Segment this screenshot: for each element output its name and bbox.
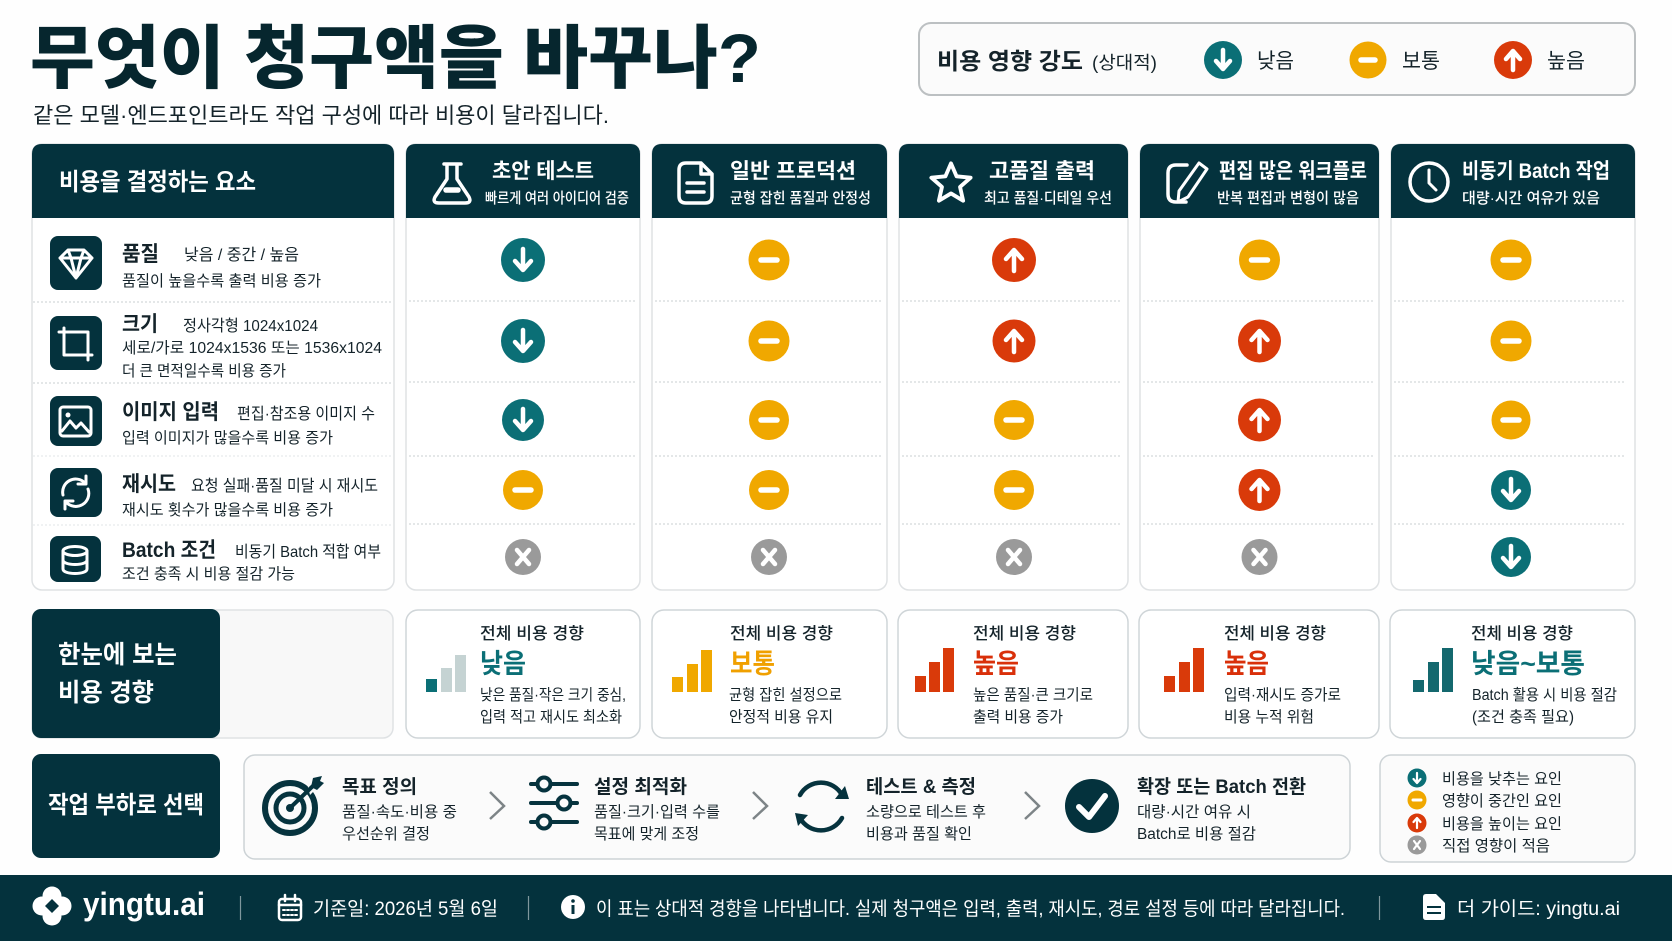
icon: low: [501, 238, 545, 282]
column: standard production: [652, 144, 887, 590]
summary card: high: 높은 품질·큰 크기로: [973, 686, 1093, 704]
panel: cost factors: [32, 144, 394, 590]
icon: high: [1238, 320, 1281, 362]
icon: minimal: [751, 539, 787, 575]
bar chart: high: [915, 648, 954, 692]
subtitle: 같은 모델·엔드포인트라도 작업 구성에 따라 비용이 달라집니다.: [33, 103, 609, 128]
factor: retry: 요청 실패·품질 미달 시 재시도: [191, 477, 378, 495]
summary heading panel: [32, 609, 393, 738]
icon: minimal: [505, 539, 541, 575]
legend: cost impact strength: 보통: [1402, 50, 1440, 73]
factor: image input: [50, 396, 375, 447]
step: optimise settings: 설정 최적화: [594, 776, 687, 798]
step: scale or batch: [1065, 776, 1306, 843]
factor: quality: 낮음 / 중간 / 높음: [184, 246, 299, 264]
legend: cost impact strength: 높음: [1547, 50, 1585, 73]
column: standard production: 일반 프로덕션: [730, 160, 856, 183]
step: optimise settings: 품질·크기·입력 수를: [594, 803, 720, 821]
icon: low: [501, 319, 545, 363]
icon: medium: [748, 240, 790, 280]
factor: size: 세로/가로 1024x1536 또는 1536x1024: [122, 339, 382, 357]
summary card: medium: 균형 잡힌 설정으로: [729, 686, 842, 704]
column: draft test: 빠르게 여러 아이디어 검증: [485, 190, 629, 207]
column: async batch job: 대량·시간 여유가 있음: [1462, 190, 1600, 207]
workflow heading: [32, 754, 220, 858]
factor: retry: [50, 468, 378, 519]
column: high quality output: 최고 품질·디테일 우선: [984, 190, 1112, 207]
legend: factor key: 직접 영향이 적음: [1442, 837, 1550, 855]
legend: factor key: [1380, 755, 1635, 862]
legend: cost impact strength: 비용 영향 강도: [937, 48, 1083, 74]
step: scale or batch: 확장 또는 Batch 전환: [1137, 776, 1306, 798]
summary card: low: 입력 적고 재시도 최소화: [480, 708, 622, 726]
date: [279, 895, 498, 920]
summary card: high (edit workflow): 전체 비용 경향: [1224, 624, 1326, 643]
legend: cost impact strength: (상대적): [1092, 53, 1157, 73]
bar chart: high: [1164, 648, 1204, 692]
date: 기준일: 2026년 5월 6일: [313, 898, 498, 920]
summary card: high (edit workflow): 높음: [1224, 649, 1269, 679]
factor: retry: 재시도: [122, 473, 176, 496]
bar chart: low: [426, 655, 466, 692]
summary card: high: 높음: [973, 649, 1019, 679]
factor: batch condition: 조건 충족 시 비용 절감 가능: [122, 565, 295, 583]
bar chart: low to medium: [1413, 648, 1453, 692]
icon: medium: [1492, 400, 1530, 440]
icon: minimal: [996, 539, 1032, 575]
factor: batch condition: 비동기 Batch 적합 여부: [235, 543, 381, 561]
summary heading panel: 비용 경향: [58, 679, 154, 707]
icon: medium: [994, 400, 1034, 440]
icon: high: [1238, 469, 1280, 511]
step: scale or batch: 대량·시간 여유 시: [1137, 803, 1251, 821]
icon: medium: [749, 400, 789, 440]
summary card: medium: 보통: [730, 649, 775, 679]
factor: image input: 이미지 입력: [122, 401, 219, 424]
icon: medium: [1490, 240, 1532, 280]
factor: image input: 편집·참조용 이미지 수: [237, 405, 375, 423]
step: optimise settings: [531, 776, 720, 843]
summary card: high: 전체 비용 경향: [973, 624, 1076, 643]
summary card: high (edit workflow): [1139, 610, 1379, 738]
arrow: [753, 792, 767, 819]
step: define goal: 목표 정의: [342, 776, 417, 798]
icon: high: [992, 320, 1036, 362]
icon: high: [992, 238, 1036, 282]
step: test and measure: 비용과 품질 확인: [866, 825, 972, 843]
legend: factor key: 영향이 중간인 요인: [1442, 792, 1562, 810]
summary card: low: 낮은 품질·작은 크기 중심,: [480, 686, 626, 704]
legend: cost impact strength: 낮음: [1257, 50, 1294, 73]
factor: retry: 재시도 횟수가 많을수록 비용 증가: [122, 501, 333, 519]
factor: size: 크기: [122, 313, 158, 336]
step: define goal: 품질·속도·비용 중: [342, 803, 457, 821]
icon: low: [502, 399, 544, 441]
panel: cost factors: 비용을 결정하는 요소: [59, 169, 256, 196]
icon: low: [1491, 537, 1531, 577]
legend: cost impact strength: [919, 23, 1635, 95]
column: standard production: 균형 잡힌 품질과 안정성: [730, 190, 871, 207]
factor: size: [50, 313, 382, 380]
column: async batch job: 비동기 Batch 작업: [1462, 160, 1610, 183]
summary card: low to medium: (조건 충족 필요): [1472, 708, 1574, 726]
step: define goal: [265, 776, 457, 843]
summary card: high (edit workflow): 입력·재시도 증가로: [1224, 686, 1341, 704]
legend: factor key: 비용을 높이는 요인: [1442, 815, 1562, 833]
factor: quality: 품질이 높을수록 출력 비용 증가: [122, 272, 321, 290]
factor: quality: 품질: [122, 243, 159, 266]
icon: medium: [994, 470, 1034, 510]
footer bar: [0, 875, 1672, 941]
bar chart: medium: [672, 650, 712, 692]
icon: high: [1238, 398, 1281, 442]
step: test and measure: 테스트 & 측정: [866, 776, 976, 798]
summary card: low to medium: 낮음~보통: [1471, 649, 1585, 679]
column: draft test: 초안 테스트: [492, 160, 594, 183]
workflow heading: 작업 부하로 선택: [48, 792, 204, 819]
factor: size: 더 큰 면적일수록 비용 증가: [122, 362, 286, 380]
factor: size: 정사각형 1024x1024: [183, 317, 318, 335]
column: draft test: [406, 144, 640, 590]
panel: workflow steps: [244, 755, 1350, 859]
column: edit-heavy workflow: 편집 많은 워크플로: [1219, 160, 1367, 183]
icon: minimal: [1242, 539, 1278, 575]
column: edit-heavy workflow: 반복 편집과 변형이 많음: [1217, 190, 1359, 207]
factor: quality: [50, 236, 321, 290]
logo: yingtu.ai: [83, 886, 205, 922]
summary card: medium: [652, 610, 887, 738]
icon: low: [1491, 470, 1531, 510]
summary card: low to medium: [1390, 610, 1635, 738]
step: scale or batch: Batch로 비용 절감: [1137, 825, 1256, 843]
guide link: [1423, 894, 1620, 920]
icon: medium: [503, 470, 543, 510]
summary card: medium: 전체 비용 경향: [730, 624, 833, 643]
summary card: low: [406, 610, 640, 738]
summary card: high (edit workflow): 비용 누적 위험: [1224, 708, 1314, 726]
note: 이 표는 상대적 경향을 나타냅니다. 실제 청구액은 입력, 출력, 재시도, 경로 설정 등에 따라 달라집니다.: [596, 898, 1345, 920]
column: async batch job: [1391, 144, 1635, 590]
factor: batch condition: [50, 536, 381, 583]
factor: batch condition: Batch 조건: [122, 539, 216, 562]
logo: [32, 886, 205, 926]
summary card: low: 전체 비용 경향: [480, 624, 584, 643]
icon: medium: [1239, 240, 1280, 280]
summary card: high: 출력 비용 증가: [973, 708, 1063, 726]
arrow: [490, 792, 504, 819]
step: define goal: 우선순위 결정: [342, 825, 430, 843]
icon: medium: [749, 470, 789, 510]
factor: image input: 입력 이미지가 많을수록 비용 증가: [122, 429, 333, 447]
guide link: 더 가이드: yingtu.ai: [1457, 898, 1620, 920]
column: high quality output: [899, 144, 1128, 590]
step: test and measure: 소량으로 테스트 후: [866, 803, 986, 821]
step: test and measure: [795, 776, 986, 843]
legend: factor key: 비용을 낮추는 요인: [1442, 770, 1562, 788]
icon: medium: [1490, 320, 1532, 362]
title: 무엇이 청구액을 바꾸나?: [30, 20, 761, 97]
column: high quality output: 고품질 출력: [989, 160, 1095, 183]
summary card: high: [898, 610, 1128, 738]
arrow: [1025, 792, 1039, 819]
summary card: low to medium: Batch 활용 시 비용 절감: [1472, 686, 1617, 704]
step: optimise settings: 목표에 맞게 조정: [594, 825, 699, 843]
summary heading panel: 한눈에 보는: [58, 641, 177, 669]
summary card: low: 낮음: [480, 649, 526, 679]
column: edit-heavy workflow: [1140, 144, 1379, 590]
summary card: medium: 안정적 비용 유지: [729, 708, 833, 726]
summary card: low to medium: 전체 비용 경향: [1471, 624, 1573, 643]
icon: medium: [748, 320, 790, 362]
